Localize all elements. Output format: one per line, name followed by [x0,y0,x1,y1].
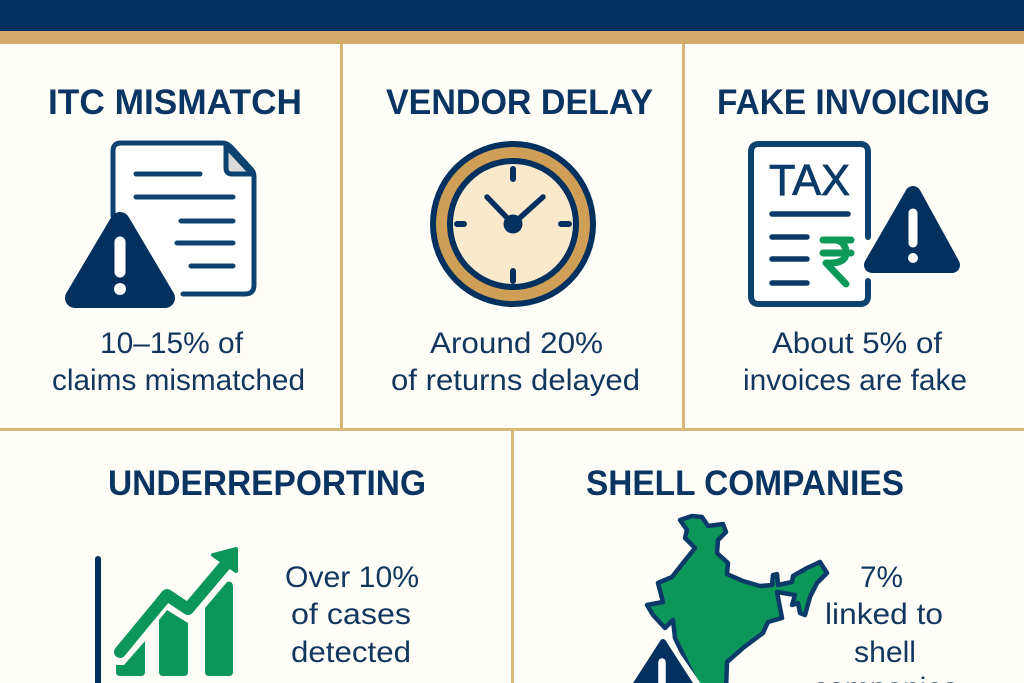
stat text: ITC mismatch: claims mismatched [52,364,305,397]
heading: underreporting: UNDERREPORTING [108,464,426,503]
panel: shell companies [586,464,958,683]
stat text: fake invoicing [743,327,967,397]
stat text: shell companies: shell [854,636,916,669]
stat text: shell companies: linked to [825,598,943,631]
heading: shell companies: SHELL COMPANIES [586,464,904,503]
stat text: fake invoicing: About 5% of [772,327,943,360]
stat text: vendor delay [391,327,640,397]
header band [0,0,1024,44]
stat text: ITC mismatch [52,327,305,397]
stat text: ITC mismatch: 10–15% of [100,327,244,360]
stat text: vendor delay: of returns delayed [391,364,640,397]
heading: fake invoicing: FAKE INVOICING [717,83,990,122]
icon: document with warning [75,143,254,298]
icon: rising bar chart [95,549,236,683]
icon: tax invoice with warning: TAX [769,156,850,205]
panel: ITC mismatch [48,83,305,397]
stat text: underreporting: of cases [291,598,411,631]
icon: map of India with warning [612,516,827,683]
stat text: fake invoicing: invoices are fake [743,364,967,397]
icon: tax invoice with warning [751,144,952,304]
stat text: shell companies: 7% [860,561,903,594]
stat text: underreporting [285,561,419,669]
panel: vendor delay [386,83,653,397]
stat text: underreporting: detected [291,636,411,669]
heading: ITC mismatch: ITC MISMATCH [48,83,302,122]
heading: vendor delay: VENDOR DELAY [386,83,653,122]
stat text: vendor delay: Around 20% [430,327,603,360]
stat text: shell companies [813,561,958,683]
icon: clock [433,144,593,304]
stat text: underreporting: Over 10% [285,561,419,594]
panel: fake invoicing [717,83,990,397]
panel: underreporting [95,464,426,683]
